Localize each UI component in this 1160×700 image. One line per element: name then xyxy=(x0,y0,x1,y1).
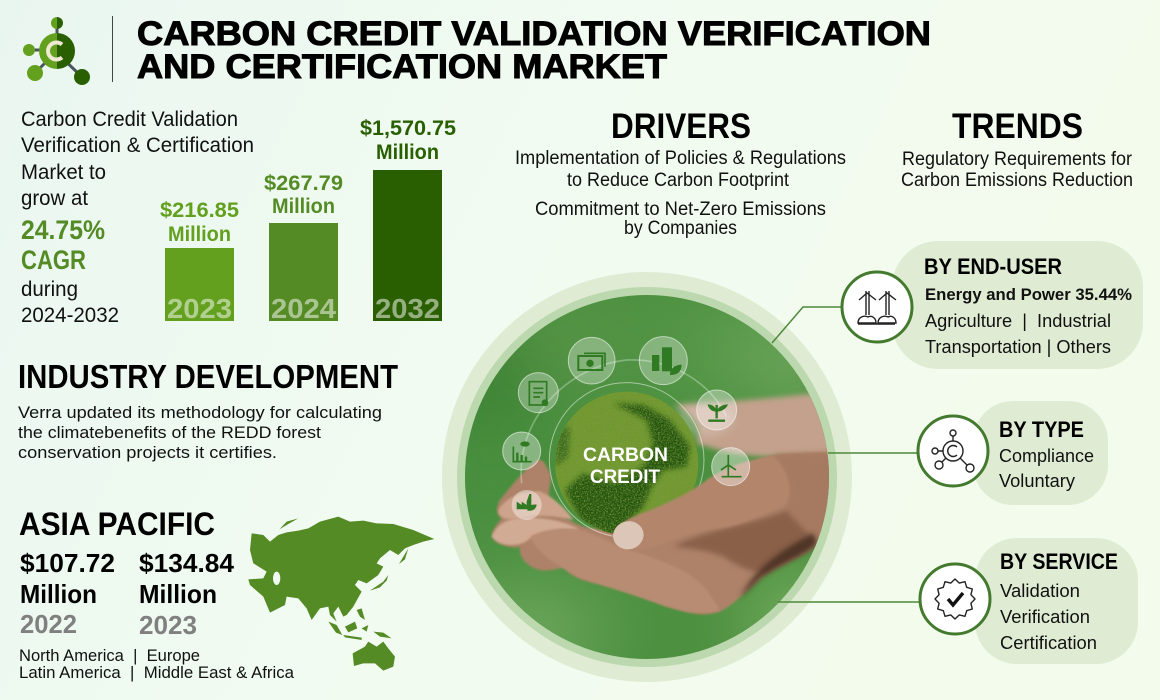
panel: by service: Certification xyxy=(1000,633,1097,653)
asia pacific stats: ASIA PACIFIC xyxy=(19,506,215,542)
bar chart xyxy=(160,117,456,324)
market growth text: during xyxy=(21,278,78,301)
bar 2024 xyxy=(264,172,343,324)
floating icon: green buildings xyxy=(639,337,687,385)
central photo: hands holding moss globe xyxy=(465,295,829,659)
market growth text xyxy=(21,108,254,327)
panel: by type: BY TYPE xyxy=(999,417,1084,442)
thumb xyxy=(612,456,769,536)
cupped hand base xyxy=(492,452,837,614)
industry development xyxy=(18,358,398,462)
asia pacific stats: $107.72 xyxy=(20,548,115,578)
floating icon: sprout xyxy=(697,390,737,430)
bar 2023 xyxy=(160,199,239,324)
icon: verified badge xyxy=(920,564,990,634)
panel: by type xyxy=(918,401,1108,505)
logo icon xyxy=(23,17,90,85)
trends block: Regulatory Requirements for xyxy=(902,149,1133,170)
industry development: the climatebenefits of the REDD forest xyxy=(18,423,321,442)
asia pacific stats: 2022 xyxy=(20,609,77,639)
bar 2032: $1,570.75 xyxy=(360,117,456,140)
asia pacific stats: $134.84 xyxy=(139,548,235,578)
asia pacific stats xyxy=(19,506,295,682)
bar 2032 xyxy=(360,117,456,324)
drivers block: DRIVERS xyxy=(611,107,751,146)
market growth text: Market to xyxy=(21,161,106,184)
market growth text: grow at xyxy=(21,187,88,210)
bar 2024: 2024 xyxy=(271,293,336,324)
panel: by service: Validation xyxy=(1000,581,1080,601)
icon: carbon molecule xyxy=(918,416,988,486)
trends block: Carbon Emissions Reduction xyxy=(901,170,1133,191)
back of hand xyxy=(776,450,829,542)
panel: by end-user xyxy=(842,241,1143,369)
bar 2032: 2032 xyxy=(375,293,440,324)
bar 2023: $216.85 xyxy=(160,199,239,222)
asia pacific stats: 2023 xyxy=(139,610,197,640)
floating icon: factory xyxy=(512,490,542,520)
panel: by service: Verification xyxy=(1000,607,1090,627)
title: CARBON CREDIT VALIDATION VERIFICATION xyxy=(137,15,931,53)
trends block: TRENDS xyxy=(952,107,1083,146)
asia pacific stats: Million xyxy=(20,579,97,609)
bar 2024: $267.79 xyxy=(264,172,343,195)
drivers block: Commitment to Net-Zero Emissions xyxy=(535,199,826,220)
palm shadow xyxy=(673,510,817,573)
industry development: conservation projects it certifies. xyxy=(18,443,277,462)
title xyxy=(137,15,931,86)
trends block xyxy=(901,107,1133,191)
panel: by end-user: Transportation | Others xyxy=(925,337,1111,357)
panel: by end-user: Energy and Power 35.44% xyxy=(925,285,1132,304)
floating icon: document xyxy=(518,373,558,413)
globe label: CREDIT xyxy=(590,467,660,488)
industry development: INDUSTRY DEVELOPMENT xyxy=(18,358,398,395)
drivers block: to Reduce Carbon Footprint xyxy=(567,170,790,191)
drivers block: Implementation of Policies & Regulations xyxy=(515,148,846,169)
map: asia pacific xyxy=(248,517,434,671)
central image rings xyxy=(442,272,852,682)
panel: by end-user: Agriculture | Industrial xyxy=(925,311,1111,331)
globe label xyxy=(584,448,667,483)
title: AND CERTIFICATION MARKET xyxy=(137,48,667,86)
market growth text: Carbon Credit Validation xyxy=(21,108,238,131)
palm xyxy=(530,529,720,613)
bar 2024: Million xyxy=(272,195,335,218)
icon: wind turbines xyxy=(842,272,912,342)
bar 2023: 2023 xyxy=(167,293,232,324)
market growth text: 24.75% xyxy=(21,215,105,245)
market growth text: 2024-2032 xyxy=(21,304,119,327)
drivers block: by Companies xyxy=(624,218,737,239)
market growth text: CAGR xyxy=(21,245,86,275)
panel: by service: BY SERVICE xyxy=(1000,549,1118,574)
asia pacific stats: Latin America | Middle East & Africa xyxy=(19,663,295,682)
connector lines xyxy=(772,307,920,602)
fingers xyxy=(498,491,573,520)
moss globe xyxy=(555,392,698,535)
bar 2023: Million xyxy=(168,223,231,246)
panel: by type: Voluntary xyxy=(999,471,1075,491)
asia pacific stats: Million xyxy=(139,579,217,609)
asia pacific stats: North America | Europe xyxy=(19,646,200,665)
floating icon: emissions chart xyxy=(503,432,541,470)
drivers block xyxy=(515,107,846,239)
panel: by end-user: BY END-USER xyxy=(924,254,1062,279)
bar 2032: Million xyxy=(376,141,439,164)
back forearm xyxy=(673,394,837,460)
panel: by service xyxy=(920,538,1138,664)
globe label: CARBON xyxy=(583,445,668,466)
floating icon: wind turbine xyxy=(712,448,750,486)
market growth text: Verification & Certification xyxy=(21,134,254,157)
panel: by type: Compliance xyxy=(999,446,1094,466)
industry development: Verra updated its methodology for calculating xyxy=(18,403,382,422)
floating icon: money xyxy=(568,337,615,384)
